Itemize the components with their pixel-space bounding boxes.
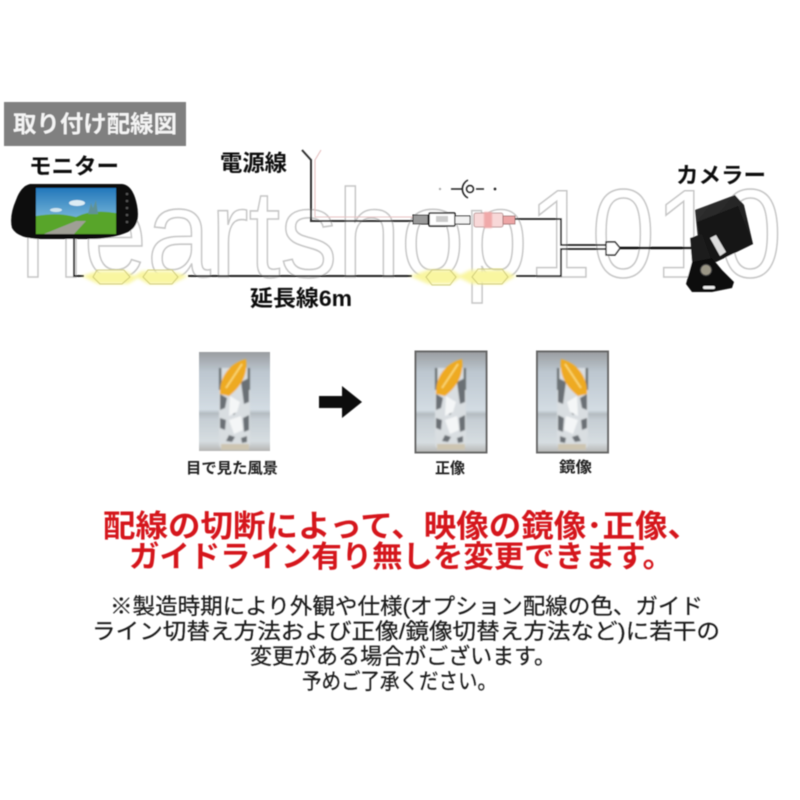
text block: disclaimer: 変更がある場合がございます。	[250, 644, 556, 669]
icon: rear camera	[686, 195, 753, 292]
text block: disclaimer: 予めご了承ください。	[302, 669, 497, 694]
callout: red notice: ガイドライン有り無しを変更できます。	[129, 541, 673, 574]
connector: yellow RCA pair right	[410, 269, 516, 285]
heading: installation wiring diagram	[4, 102, 186, 146]
wire: power cable with fork	[302, 150, 414, 221]
connector: yellow RCA pair left	[82, 270, 188, 284]
label: monitor: モニター	[29, 154, 119, 179]
icon: cut symbol	[440, 180, 496, 198]
text block: disclaimer	[92, 594, 720, 694]
heading: installation wiring diagram: 取り付け配線図	[13, 111, 177, 137]
photo: normal image	[416, 352, 486, 452]
icon: mirror monitor	[11, 184, 138, 239]
caption: mirror image: 鏡像	[559, 459, 592, 476]
connector: camera plug	[606, 242, 620, 255]
text block: disclaimer: ※製造時期により外観や仕様(オプション配線の色、ガイド	[110, 594, 703, 619]
callout: red notice: 配線の切断によって、映像の鏡像･正像、	[103, 509, 700, 544]
connector: pink plug	[474, 212, 515, 228]
caption: normal image: 正像	[435, 460, 465, 477]
photo: mirror image	[537, 352, 608, 452]
photo: view by eye	[199, 352, 270, 451]
text block: disclaimer: ライン切替え方法および正像/鏡像切替え方法など)に若干の	[92, 619, 720, 644]
wires: junction to camera	[515, 219, 692, 276]
wire: extension cable 6m	[188, 275, 412, 277]
caption: view by eye: 目で見た風景	[186, 460, 278, 477]
label: extension cable 6m: 延長線6m	[250, 286, 352, 311]
arrow	[319, 386, 362, 418]
label: camera: カメラー	[676, 163, 766, 188]
callout: red notice	[103, 509, 700, 574]
wire: monitor to extension cable	[74, 238, 84, 276]
label: power cable: 電源線	[220, 151, 287, 176]
connector: white plug	[413, 213, 470, 226]
